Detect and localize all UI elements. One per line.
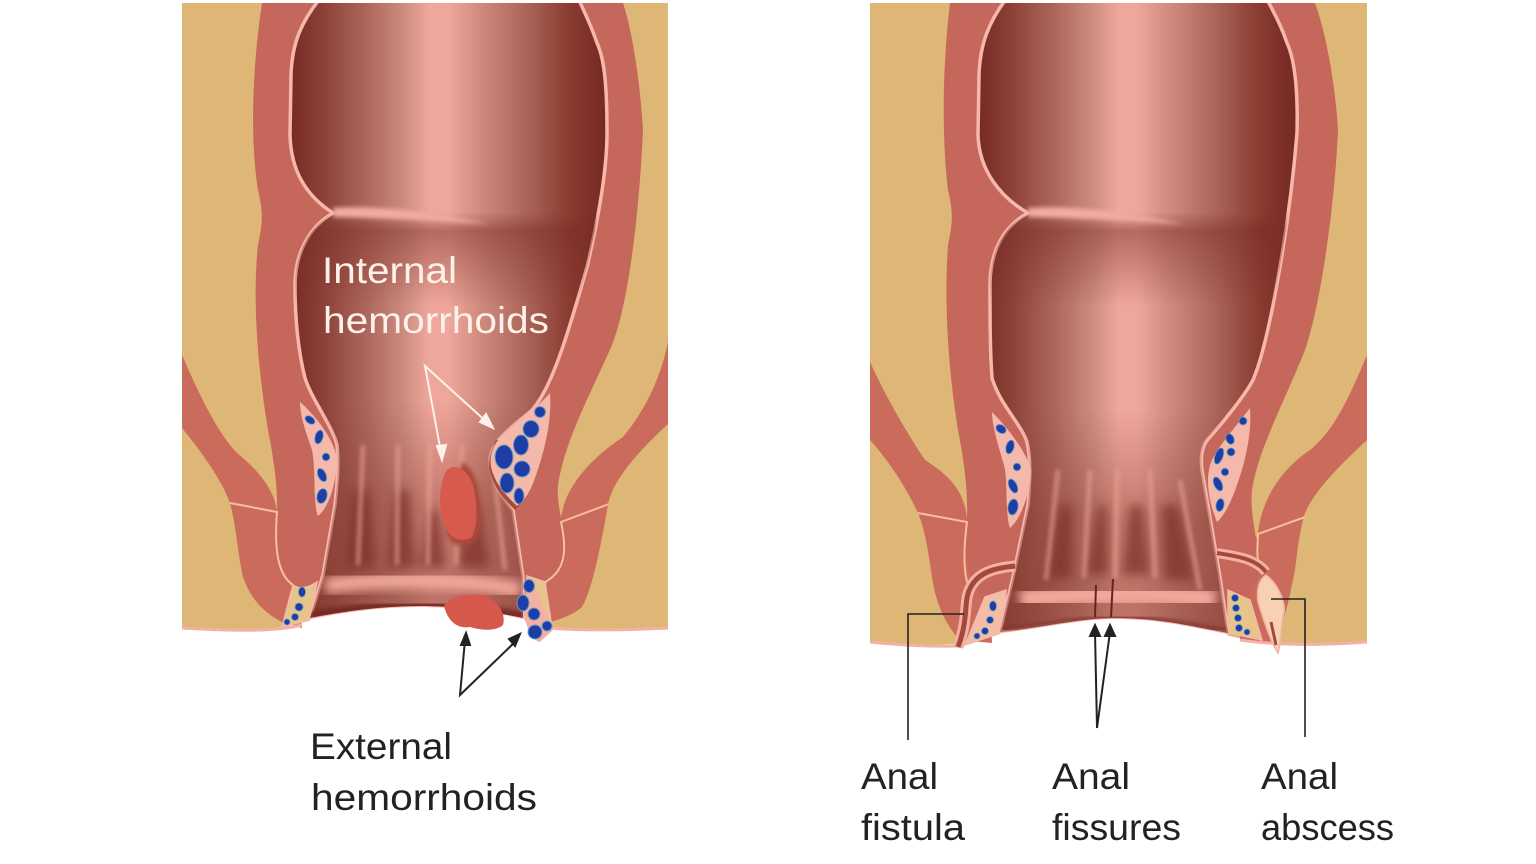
muscle: right levator and sphincter	[1240, 355, 1367, 642]
label: external hemorrhoids: External	[310, 726, 452, 767]
top white margin	[860, 0, 1380, 3]
pad: right internal plexus with swollen veins	[489, 393, 550, 510]
anal fissures	[1095, 579, 1113, 617]
pad: right plexus	[1208, 408, 1250, 522]
label: external hemorrhoids	[310, 726, 537, 818]
white outside below anal verge	[302, 607, 532, 635]
left external veins	[284, 587, 306, 625]
label: internal hemorrhoids	[322, 250, 549, 341]
panel: anal conditions diagram	[860, 0, 1394, 848]
arrows: anal fissures	[1090, 625, 1115, 728]
infographic canvas	[182, 3, 1393, 840]
muscle: left levator and sphincter	[182, 355, 302, 628]
muscle: rectal wall	[253, 3, 643, 622]
sphincter boundary lines	[230, 503, 609, 585]
white outside below anal verge	[992, 619, 1235, 650]
label: anal fistula: Anal	[861, 756, 938, 797]
label: anal fistula: fistula	[861, 807, 965, 848]
perineal skin edge	[870, 640, 1367, 646]
pad: left plexus	[992, 412, 1031, 528]
anal fistula tract	[958, 566, 1015, 647]
arrows: external hemorrhoids	[460, 633, 520, 695]
label: internal hemorrhoids: hemorrhoids	[323, 300, 549, 341]
label: external hemorrhoids: hemorrhoids	[311, 777, 537, 818]
muscle: right levator and sphincter	[545, 342, 668, 622]
lower right veins	[1232, 594, 1250, 635]
label: anal abscess	[1261, 756, 1394, 848]
leader: anal abscess	[1271, 599, 1305, 737]
surrounding fatty tissue	[182, 3, 668, 630]
label: anal abscess: Anal	[1261, 756, 1338, 797]
lower tissue wedges	[282, 576, 552, 628]
lower tissue wedges	[965, 590, 1262, 645]
label: internal hemorrhoids: Internal	[322, 250, 457, 291]
right external veins	[517, 576, 553, 642]
panel: hemorrhoids diagram	[170, 0, 1380, 818]
label: anal fistula	[861, 756, 965, 848]
lumen: rectum and anal canal	[290, 0, 610, 618]
muscle: rectal wall	[944, 3, 1338, 632]
leader: anal fistula	[908, 614, 964, 740]
label: anal abscess: abscess	[1261, 807, 1394, 848]
pad: left internal plexus	[300, 402, 337, 516]
right fistula and abscess	[1217, 553, 1284, 653]
top white margin	[170, 0, 1380, 3]
label: anal fissures: fissures	[1052, 807, 1181, 848]
surrounding fatty tissue	[870, 3, 1367, 645]
external hemorrhoid	[444, 594, 504, 630]
sphincter boundary lines	[918, 513, 1305, 585]
lower left veins	[974, 601, 996, 639]
arrows: internal hemorrhoids	[425, 366, 493, 460]
label: anal fissures: Anal	[1052, 756, 1130, 797]
label: anal fissures	[1052, 756, 1181, 848]
internal hemorrhoid	[440, 462, 482, 546]
perineal skin edge	[182, 625, 668, 630]
muscle: left levator and sphincter	[870, 362, 992, 643]
lumen: rectum and anal canal	[975, 0, 1300, 636]
